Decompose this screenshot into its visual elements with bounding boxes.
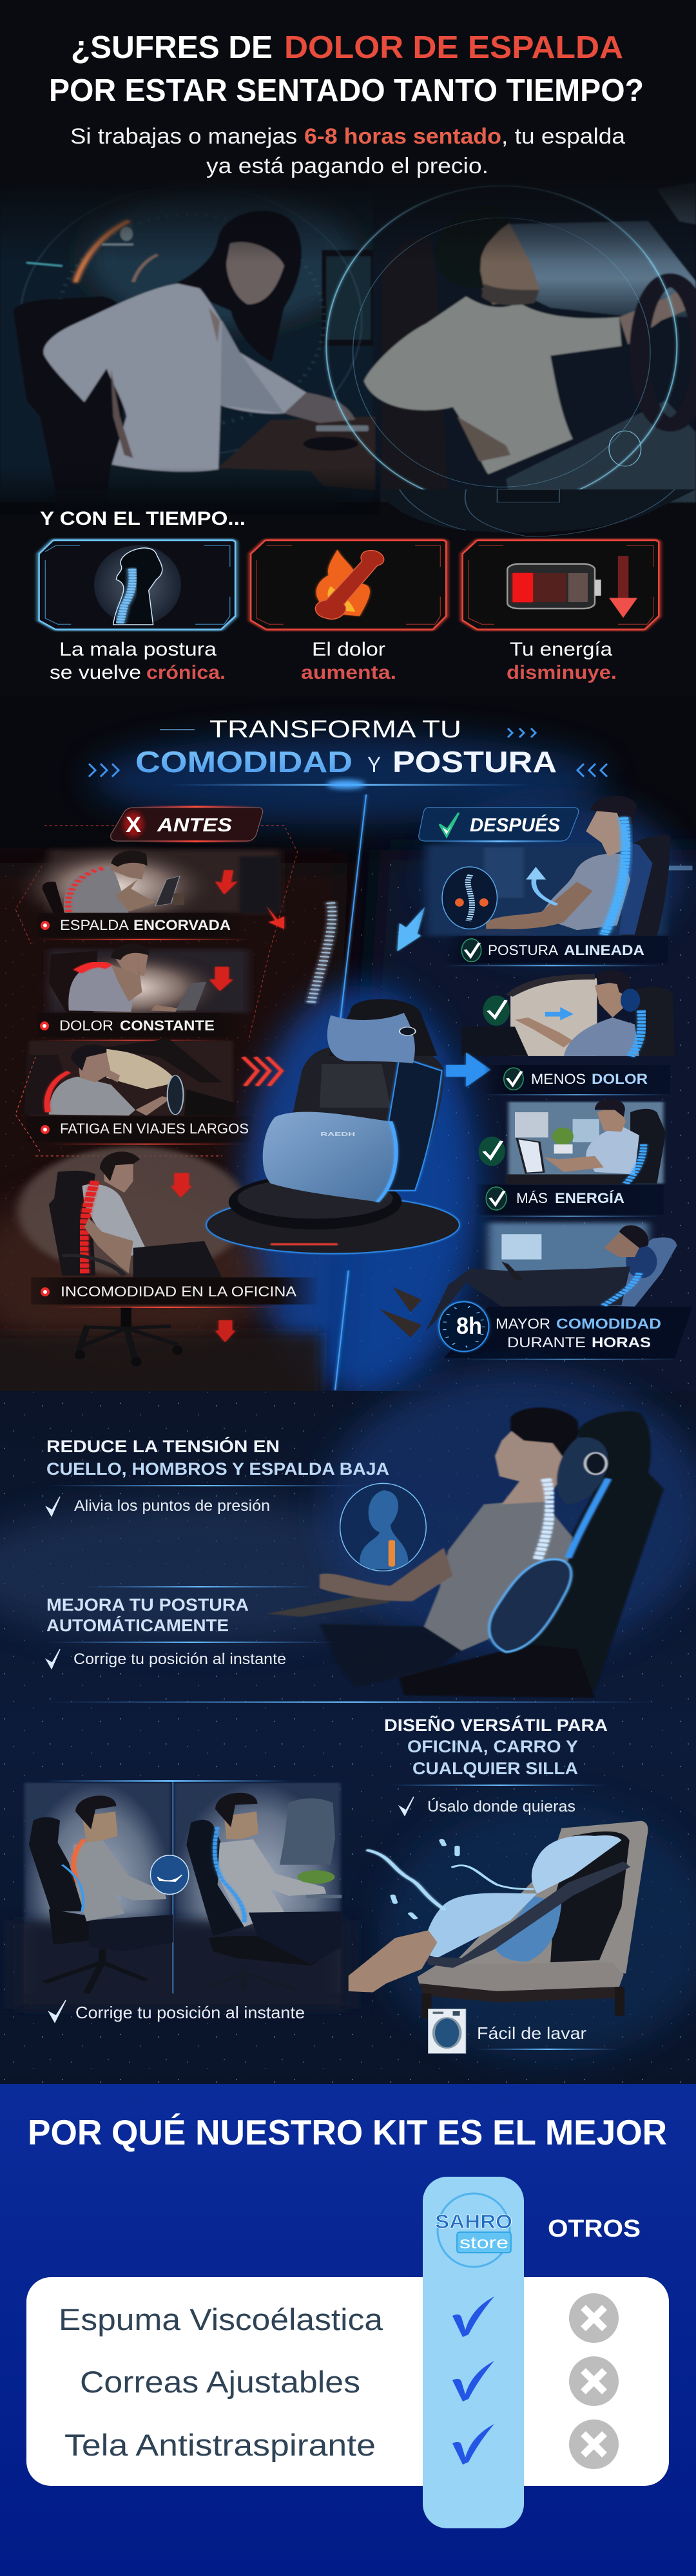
caption: mayor comodidad durante horas: [496, 1316, 661, 1350]
caption: postura alineada: [488, 942, 644, 958]
icon: 8h clock: [439, 1302, 488, 1351]
caption band: mas energia: [475, 1185, 664, 1215]
icon: chevrons: [89, 728, 607, 777]
icon: red arrow bottom: [215, 1320, 235, 1342]
lumbar pillow: [489, 1559, 571, 1652]
back cushion: [550, 1832, 630, 1962]
badge: despues: DESPUÉS: [470, 814, 560, 836]
caption: menos dolor: MENOS: [531, 1071, 586, 1087]
heading: diseno versatil: DISEÑO VERSÁTIL PARA: [384, 1715, 608, 1735]
photo: man with neck and lumbar cushions: [266, 1408, 664, 1698]
woman: [44, 211, 355, 502]
heading: transforma tu comodidad y postura: [89, 716, 607, 789]
badge: check: [483, 996, 510, 1026]
icon: low battery: [507, 564, 601, 609]
cell: fatiga en viajes largos: [24, 1039, 282, 1115]
icon: red arrow down: [215, 870, 238, 895]
icon: red arrow down: [171, 1173, 192, 1197]
platform: [206, 1046, 459, 1254]
subtitle: ya está pagando el precio.: [206, 154, 488, 178]
heading: y con el tiempo: Y CON EL TIEMPO...: [40, 508, 246, 529]
caption: fatiga: FATIGA EN VIAJES LARGOS: [60, 1121, 249, 1137]
heading: diseno versatil: OFICINA, CARRO Y: [407, 1737, 578, 1756]
product: seat kit with cushions: [206, 999, 459, 1254]
caption band: mayor comodidad: [444, 1307, 693, 1358]
chair: [524, 1411, 664, 1690]
icon: green check: [440, 813, 459, 837]
caption: mayor comodidad durante horas: DURANTE: [507, 1334, 586, 1350]
label: mala postura: crónica.: [146, 662, 226, 683]
logo: sahro store: store: [459, 2233, 508, 2252]
icon: curved arrow up: [534, 876, 557, 905]
label: 8h: 8h: [456, 1312, 482, 1339]
row: correas: [80, 2356, 619, 2406]
seat of driver: [382, 235, 449, 502]
monitor: [322, 250, 373, 346]
caption: mayor comodidad durante horas: HORAS: [592, 1334, 651, 1350]
row: tela: Tela Antistraspirante: [64, 2428, 376, 2462]
pants: [320, 1624, 461, 1688]
subtitle: , tu espalda: [501, 124, 625, 149]
heading: reduce la tension: [46, 1436, 389, 1486]
chair: [417, 1821, 648, 2018]
icon: office chair base: [75, 1308, 183, 1367]
caption band: dolor constante: [38, 1013, 246, 1037]
icon: bone on fire: [315, 549, 384, 620]
chair of woman: [14, 296, 129, 502]
heading block: main title: DOLOR DE ESPALDA: [284, 30, 623, 65]
badge: check: [479, 1137, 505, 1166]
caption: dolor constante: [41, 1018, 215, 1034]
benefit: usalo: Úsalo donde quieras: [427, 1798, 575, 1815]
icon: spine silhouette: [94, 545, 181, 625]
photos: before and after posture: [14, 1780, 351, 2009]
icon: down arrow: [609, 556, 637, 618]
row: tela: [64, 2420, 619, 2469]
desk: [218, 417, 375, 490]
cell: mayor comodidad: [380, 1222, 677, 1338]
label: el dolor: El dolor: [312, 639, 385, 660]
shirt: [424, 1499, 573, 1651]
label: energia: [507, 639, 617, 683]
panel: comparison: [0, 2084, 696, 2576]
table card: [26, 2277, 669, 2486]
caption: incomodidad: INCOMODIDAD EN LA OFICINA: [61, 1283, 296, 1300]
panel: mala postura: [39, 540, 235, 629]
background seat: [280, 1798, 335, 1865]
caption: mas energia: ENERGÍA: [555, 1190, 624, 1206]
cell: mas energia: [479, 1099, 666, 1184]
caption: menos dolor: [531, 1071, 648, 1087]
hand: [349, 1930, 437, 1993]
logo: sahro store: SAHRO: [435, 2210, 512, 2233]
benefit: corrige: Corrige tu posición al instante: [73, 1651, 286, 1668]
highlighted column: [423, 2177, 524, 2528]
lines and photos in transforma section: [9, 795, 693, 1390]
photo: woman and man in back pain: [0, 167, 696, 506]
label: mala postura: La mala postura: [59, 639, 217, 660]
platform: RAEDH: [320, 1132, 355, 1137]
caption: dolor constante: DOLOR: [59, 1018, 113, 1034]
caption: mayor comodidad durante horas: MAYOR: [496, 1316, 550, 1332]
head: [495, 1425, 573, 1504]
bottom fade of scene: [0, 467, 380, 515]
heading block: main title: ¿SUFRES DE: [71, 30, 273, 65]
row: espuma: [59, 2293, 619, 2343]
panel: el dolor: [251, 540, 446, 629]
person right: [186, 1793, 342, 1990]
caption: mas energia: [516, 1190, 624, 1206]
badge: despues check for alineada: [461, 939, 481, 962]
caption band: postura alineada: [444, 936, 668, 963]
caption: postura alineada: POSTURA: [488, 942, 558, 958]
caption: espalda encorvada: ENCORVADA: [133, 917, 231, 933]
heading: transforma tu comodidad y postura: Y: [367, 753, 381, 777]
cell: dolor constante: [35, 943, 249, 1027]
cell: postura alineada: [426, 796, 693, 936]
label: energia: Tu energía: [510, 639, 612, 660]
caption: dolor constante: CONSTANTE: [120, 1018, 215, 1034]
label: mala postura: [50, 639, 226, 683]
caption: espalda encorvada: [42, 917, 231, 933]
front flap: [424, 1893, 537, 1958]
column heading: otros: OTROS: [548, 2215, 641, 2242]
icon: chevrons red: [243, 1057, 282, 1086]
logo: sahro store: [435, 2193, 512, 2267]
HUD right: [326, 186, 677, 506]
heading: reduce la tension: CUELLO, HOMBROS Y ESPALDA BAJA: [46, 1459, 389, 1479]
heading: why our kit: POR QUÉ NUESTRO KIT ES EL MEJOR: [28, 2112, 667, 2152]
person left: [29, 1795, 173, 1993]
caption: mayor comodidad durante horas: COMODIDAD: [556, 1316, 661, 1332]
caption: mas energia: MÁS: [516, 1190, 548, 1206]
divider line: [335, 795, 366, 1390]
heading: diseno versatil: [384, 1715, 609, 1786]
icon: blue right arrow: [545, 1007, 574, 1020]
cell: incomodidad en la oficina: [18, 1147, 249, 1278]
background: top section: [0, 0, 696, 696]
heading: mejora tu postura: [46, 1586, 336, 1643]
caption band: menos dolor: [484, 1065, 670, 1094]
icon: washing machine: [429, 2009, 466, 2053]
icon: spine circle: [442, 867, 497, 929]
label: energia: disminuye.: [507, 662, 617, 683]
badge: antes: ANTES: [157, 815, 232, 836]
icon: x: X: [126, 813, 141, 837]
neck pillow: [329, 999, 437, 1056]
subtitle: [70, 124, 625, 178]
badge: antes: [111, 806, 263, 842]
panel: benefits background: [0, 1372, 696, 2084]
cell: espalda encorvada: [9, 843, 280, 930]
icon: spine glow: [311, 902, 332, 1004]
caption: espalda encorvada: ESPALDA: [60, 917, 129, 933]
heading: reduce la tension: REDUCE LA TENSIÓN EN: [46, 1436, 280, 1456]
row: espuma: Espuma Viscoélastica: [59, 2302, 383, 2336]
badge: check menos dolor: [504, 1068, 523, 1090]
subtitle: Si trabajas o manejas: [70, 124, 297, 149]
row: correas: Correas Ajustables: [80, 2365, 360, 2399]
outline: antes hexagon: [15, 826, 297, 1041]
neck pillow: [557, 1437, 608, 1504]
caption: postura alineada: ALINEADA: [564, 942, 644, 958]
benefit: corrige bottom: Corrige tu posición al instante: [75, 2003, 305, 2022]
label: el dolor: aumenta.: [301, 662, 396, 683]
desk: [266, 1592, 391, 1617]
cell: menos dolor: [461, 971, 675, 1056]
benefit: alivia: Alivia los puntos de presión: [74, 1497, 270, 1515]
strap band: [426, 1861, 630, 1968]
dashboard and lower scene: [53, 489, 696, 536]
caption band: espalda encorvada: [38, 913, 246, 937]
steering wheel: [639, 280, 696, 424]
caption band: fatiga: [26, 1116, 253, 1142]
caption band: incomodidad: [31, 1277, 320, 1305]
icon: red arrow down: [209, 967, 233, 991]
heading: mejora tu postura: MEJORA TU POSTURA: [46, 1595, 249, 1615]
panel: energia: [463, 540, 659, 629]
spine: [537, 1479, 550, 1560]
HUD left: [20, 186, 362, 455]
benefit: facil de lavar: Fácil de lavar: [477, 2023, 586, 2043]
heading: diseno versatil: CUALQUIER SILLA: [412, 1759, 578, 1778]
lumbar blue: [495, 1896, 561, 1962]
icon: blue arrow down-left: [397, 907, 425, 951]
badge: despues: [419, 808, 579, 842]
water splash: [369, 1841, 533, 1918]
heading: transforma tu comodidad y postura: TRANSFORMA TU: [209, 716, 461, 743]
window of car: [510, 183, 696, 317]
heading: transforma tu comodidad y postura: POSTURA: [392, 745, 557, 779]
heading block: main title: POR ESTAR SENTADO TANTO TIEMPO?: [49, 73, 644, 108]
icon: arrow red diagonal: [266, 906, 284, 929]
icon: swap arrow circle: [151, 1855, 189, 1894]
icon: blue right arrow from product: [446, 1052, 490, 1087]
man: [364, 205, 696, 502]
caption: menos dolor: DOLOR: [592, 1071, 648, 1087]
heading: transforma tu comodidad y postura: COMODIDAD: [135, 745, 353, 779]
panel: transforma background: [0, 696, 696, 1430]
photo: washable cushion on chair: [349, 1821, 648, 2053]
spine inset circle: [340, 1483, 426, 1571]
heading block: main title: [49, 30, 644, 108]
label: mala postura: se vuelve: [50, 662, 141, 683]
arm: [320, 1548, 453, 1601]
subtitle: 6-8 horas sentado: [304, 124, 501, 149]
label: el dolor: [301, 639, 396, 683]
heading: mejora tu postura: AUTOMÁTICAMENTE: [46, 1615, 229, 1635]
badge: check mas energia: [486, 1187, 507, 1210]
